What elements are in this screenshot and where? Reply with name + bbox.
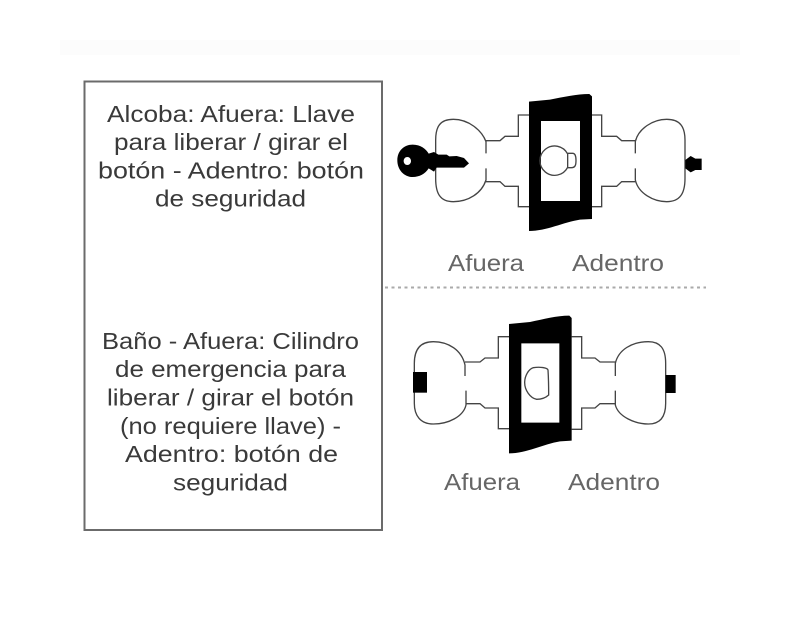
text block: Baño [102,328,359,496]
text block: Alcoba: para liberar / girar el [114,129,348,155]
latch mechanism [525,367,549,399]
label: Adentro (top): Adentro [572,250,664,276]
icon: key [397,145,469,177]
icon: privacy button [666,375,676,393]
text block: Baño: (no requiere llave) - [120,413,341,439]
outer knob outline [436,115,529,207]
text block: Baño: seguridad [173,470,288,496]
text block: Baño: liberar / girar el botón [107,384,354,410]
label: Adentro (bottom): Adentro [568,469,660,495]
panel: description box [84,82,382,530]
text block: Alcoba [98,101,364,212]
text block: Baño: Adentro: botón de [125,441,338,467]
label: Afuera (top): Afuera [448,250,524,276]
door plate [529,94,592,231]
inner knob outline [592,115,685,207]
label: Afuera (bottom): Afuera [444,469,520,495]
text block: Baño: de emergencia para [115,356,346,382]
latch mechanism [540,146,576,175]
icon: emergency cylinder [413,372,427,393]
text block: Alcoba: botón - Adentro: botón [98,158,364,184]
text block: Alcoba: Alcoba: Afuera: Llave [107,101,355,127]
icon: privacy button [685,156,702,172]
diagram: bedroom lock with key [397,94,702,231]
door plate [509,316,572,453]
diagram: bathroom lock with emergency cylinder [413,316,676,453]
outer knob outline [414,337,509,429]
text block: Baño: Baño - Afuera: Cilindro [102,328,359,354]
text block: Alcoba: de seguridad [155,186,306,212]
inner knob outline [572,337,666,429]
